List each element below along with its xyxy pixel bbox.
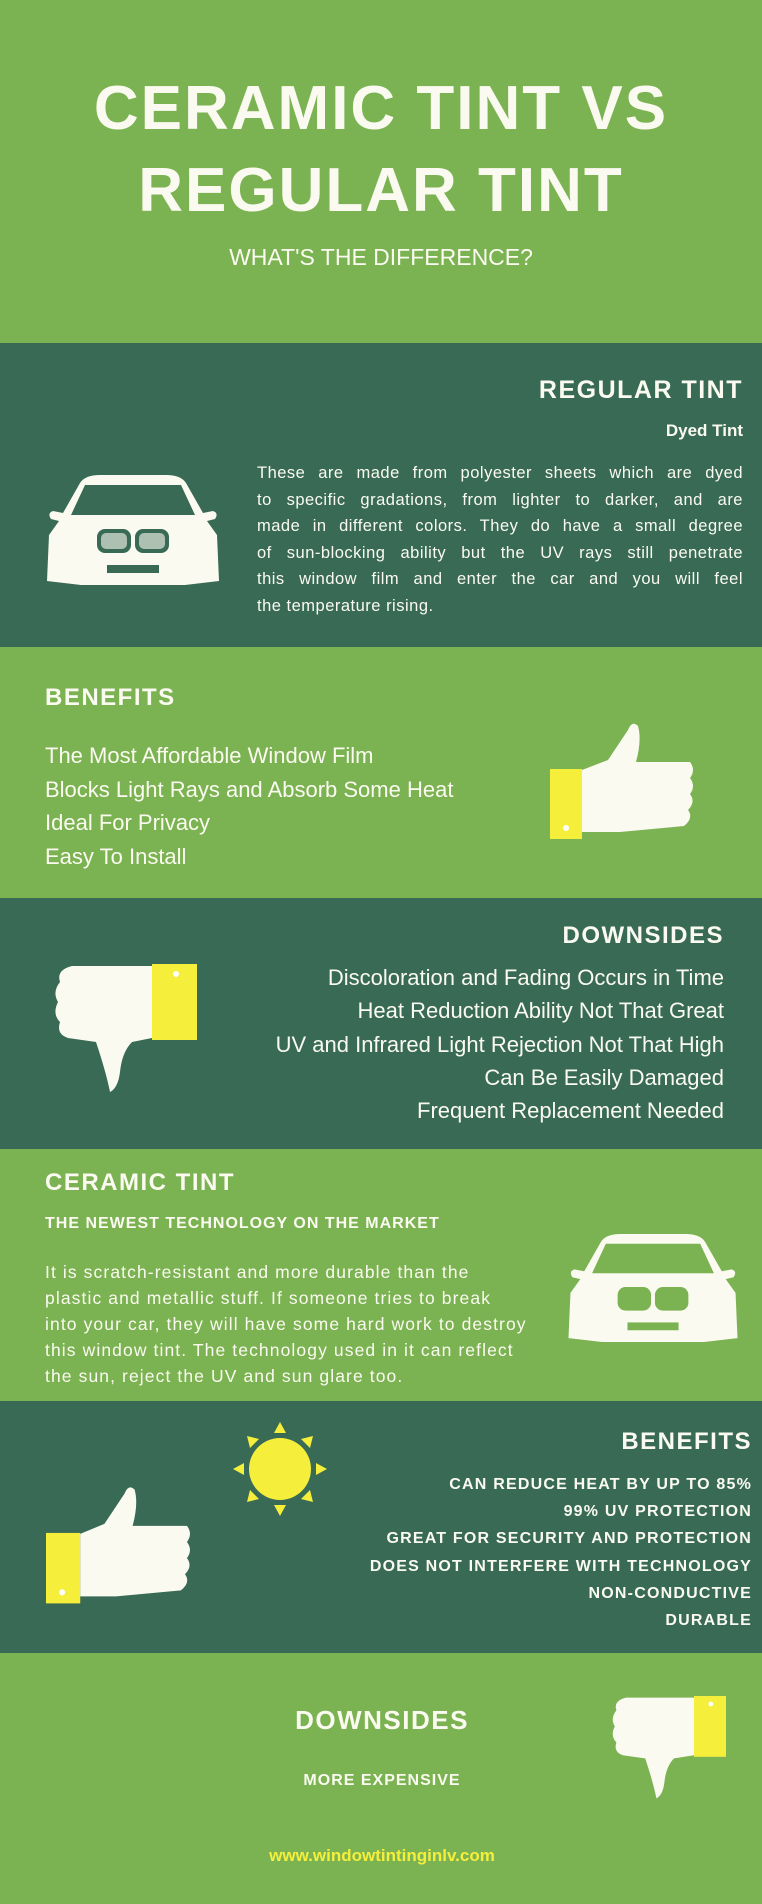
- downsides list: Heat Reduction Ability Not That Great: [358, 998, 724, 1023]
- icon: thumbs down: [612, 1696, 726, 1798]
- subtitle: WHAT'S THE DIFFERENCE?: [229, 244, 533, 270]
- description: to specific gradations, from lighter to darker, and are: [257, 490, 743, 508]
- heading: BENEFITS: [45, 684, 176, 711]
- downsides list: UV and Infrared Light Rejection Not That High: [276, 1032, 724, 1057]
- description: this window film and enter the car and you will feel: [257, 570, 743, 588]
- header panel: [0, 0, 762, 343]
- panel: regular tint: [0, 343, 762, 647]
- icon: sun: [233, 1422, 327, 1516]
- icon: car: [568, 1234, 738, 1342]
- benefits list: [370, 1476, 752, 1629]
- description: It is scratch-resistant and more durable than the: [45, 1262, 470, 1282]
- panel: ceramic benefits: [0, 1401, 762, 1653]
- downsides list: Frequent Replacement Needed: [417, 1098, 724, 1123]
- benefits list: Easy To Install: [45, 844, 186, 868]
- icon: car: [47, 475, 219, 585]
- description: [45, 1262, 527, 1386]
- heading: REGULAR TINT: [539, 376, 743, 404]
- downsides item: MORE EXPENSIVE: [303, 1772, 461, 1789]
- description: the temperature rising.: [257, 596, 434, 614]
- title: REGULAR TINT: [138, 156, 624, 225]
- downsides list: [276, 965, 724, 1123]
- benefits list: GREAT FOR SECURITY AND PROTECTION: [386, 1530, 752, 1547]
- heading: CERAMIC TINT: [45, 1169, 235, 1196]
- benefits list: [45, 743, 454, 868]
- panel: regular benefits: [0, 647, 762, 898]
- benefits list: The Most Affordable Window Film: [45, 743, 374, 768]
- benefits list: DURABLE: [665, 1612, 752, 1629]
- panel: regular downsides: [0, 898, 762, 1149]
- panel: ceramic tint: [0, 1149, 762, 1401]
- benefits list: 99% UV PROTECTION: [564, 1503, 752, 1520]
- subheading: Dyed Tint: [666, 421, 743, 440]
- description: of sun-blocking ability but the UV rays still penetrate: [257, 544, 743, 562]
- subheading: THE NEWEST TECHNOLOGY ON THE MARKET: [45, 1215, 440, 1232]
- description: [257, 464, 743, 614]
- panel: ceramic downsides: [0, 1653, 762, 1904]
- downsides list: Discoloration and Fading Occurs in Time: [328, 965, 724, 990]
- description: this window tint. The technology used in it can reflect: [45, 1340, 514, 1360]
- heading: BENEFITS: [621, 1428, 752, 1455]
- benefits list: CAN REDUCE HEAT BY UP TO 85%: [449, 1476, 752, 1493]
- heading: DOWNSIDES: [562, 922, 724, 949]
- description: the sun, reject the UV and sun glare too.: [45, 1366, 403, 1386]
- description: into your car, they will have some hard work to destroy: [45, 1314, 527, 1334]
- description: These are made from polyester sheets which are dyed: [257, 464, 743, 482]
- benefits list: NON-CONDUCTIVE: [589, 1585, 752, 1602]
- benefits list: DOES NOT INTERFERE WITH TECHNOLOGY: [370, 1558, 752, 1575]
- icon: thumbs up: [550, 724, 693, 839]
- description: plastic and metallic stuff. If someone tries to break: [45, 1288, 491, 1308]
- icon: thumbs up: [46, 1487, 190, 1604]
- downsides list: Can Be Easily Damaged: [484, 1065, 724, 1090]
- benefits list: Blocks Light Rays and Absorb Some Heat: [45, 776, 453, 802]
- icon: thumbs down: [55, 964, 197, 1092]
- benefits list: Ideal For Privacy: [45, 810, 210, 835]
- heading: DOWNSIDES: [295, 1705, 469, 1735]
- title: CERAMIC TINT VS: [94, 74, 668, 143]
- description: made in different colors. They do have a small degree: [257, 517, 743, 535]
- title: [94, 74, 668, 225]
- footer url: www.windowtintinginlv.com: [269, 1846, 495, 1865]
